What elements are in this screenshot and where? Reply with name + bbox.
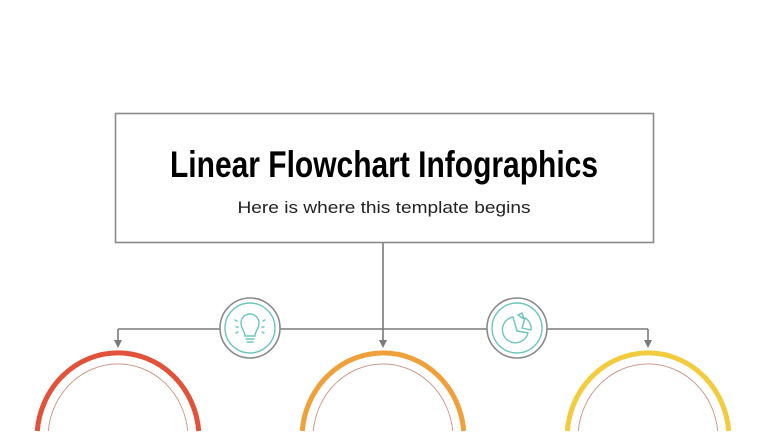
step circle 2 (orange) [302, 353, 464, 431]
subtitle: Here is where this template begins [238, 198, 530, 217]
step circle 3 (yellow) [567, 353, 729, 431]
icon: pie chart [487, 298, 547, 358]
title: Linear Flowchart Infographics [170, 144, 598, 185]
icon: lightbulb [220, 298, 280, 358]
arrowheads [114, 340, 652, 348]
connector lines [118, 243, 648, 344]
step circle 1 (red) [37, 353, 199, 431]
title box [116, 114, 654, 242]
